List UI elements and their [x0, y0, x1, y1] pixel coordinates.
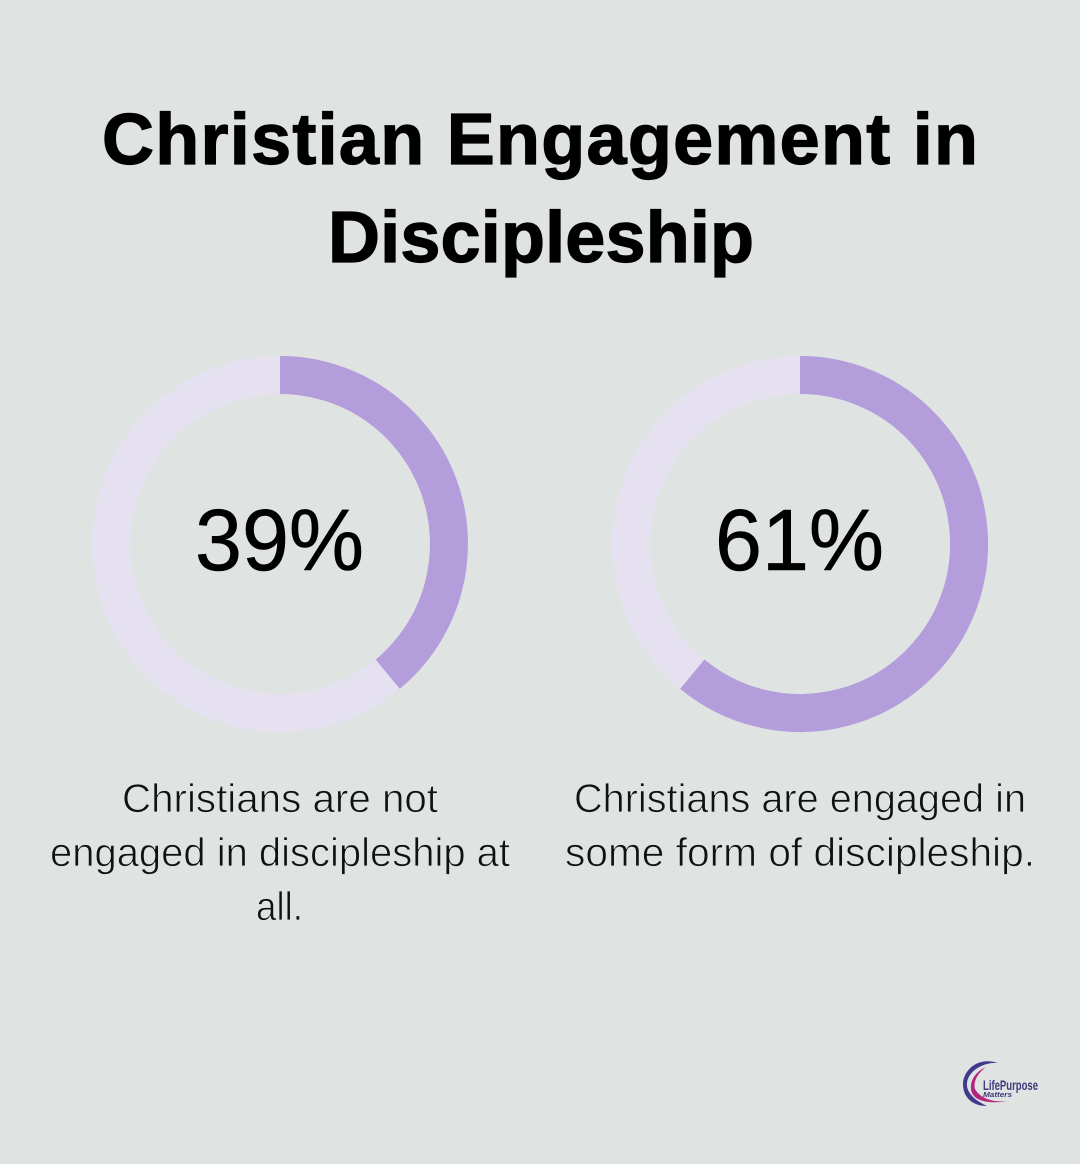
description: 39%: engaged in discipleship at: [50, 831, 510, 875]
stat: 61%: 61%: [715, 492, 884, 589]
description: 61%: Christians are engaged in: [574, 777, 1026, 821]
title: Christian Engagement in: [102, 100, 978, 180]
stat: 39%: 39%: [195, 492, 364, 589]
title: [102, 100, 978, 278]
logo: Life Purpose Matters: LifePurpose: [983, 1077, 1038, 1093]
title: Discipleship: [328, 198, 754, 278]
panel: 61 percent engaged: [565, 375, 1035, 875]
description: 39%: Christians are not: [122, 777, 438, 821]
description: 61%: some form of discipleship.: [565, 831, 1035, 875]
panel: 39 percent not engaged: [50, 375, 510, 929]
donut chart: 61%: [631, 375, 969, 713]
donut chart: 39%: [111, 375, 449, 713]
description: 39%: all.: [256, 885, 303, 929]
logo: Life Purpose Matters: Matters: [983, 1092, 1012, 1099]
description: 39%: [50, 777, 510, 929]
description: 61%: [565, 777, 1035, 875]
logo: Life Purpose Matters: [963, 1061, 1038, 1106]
